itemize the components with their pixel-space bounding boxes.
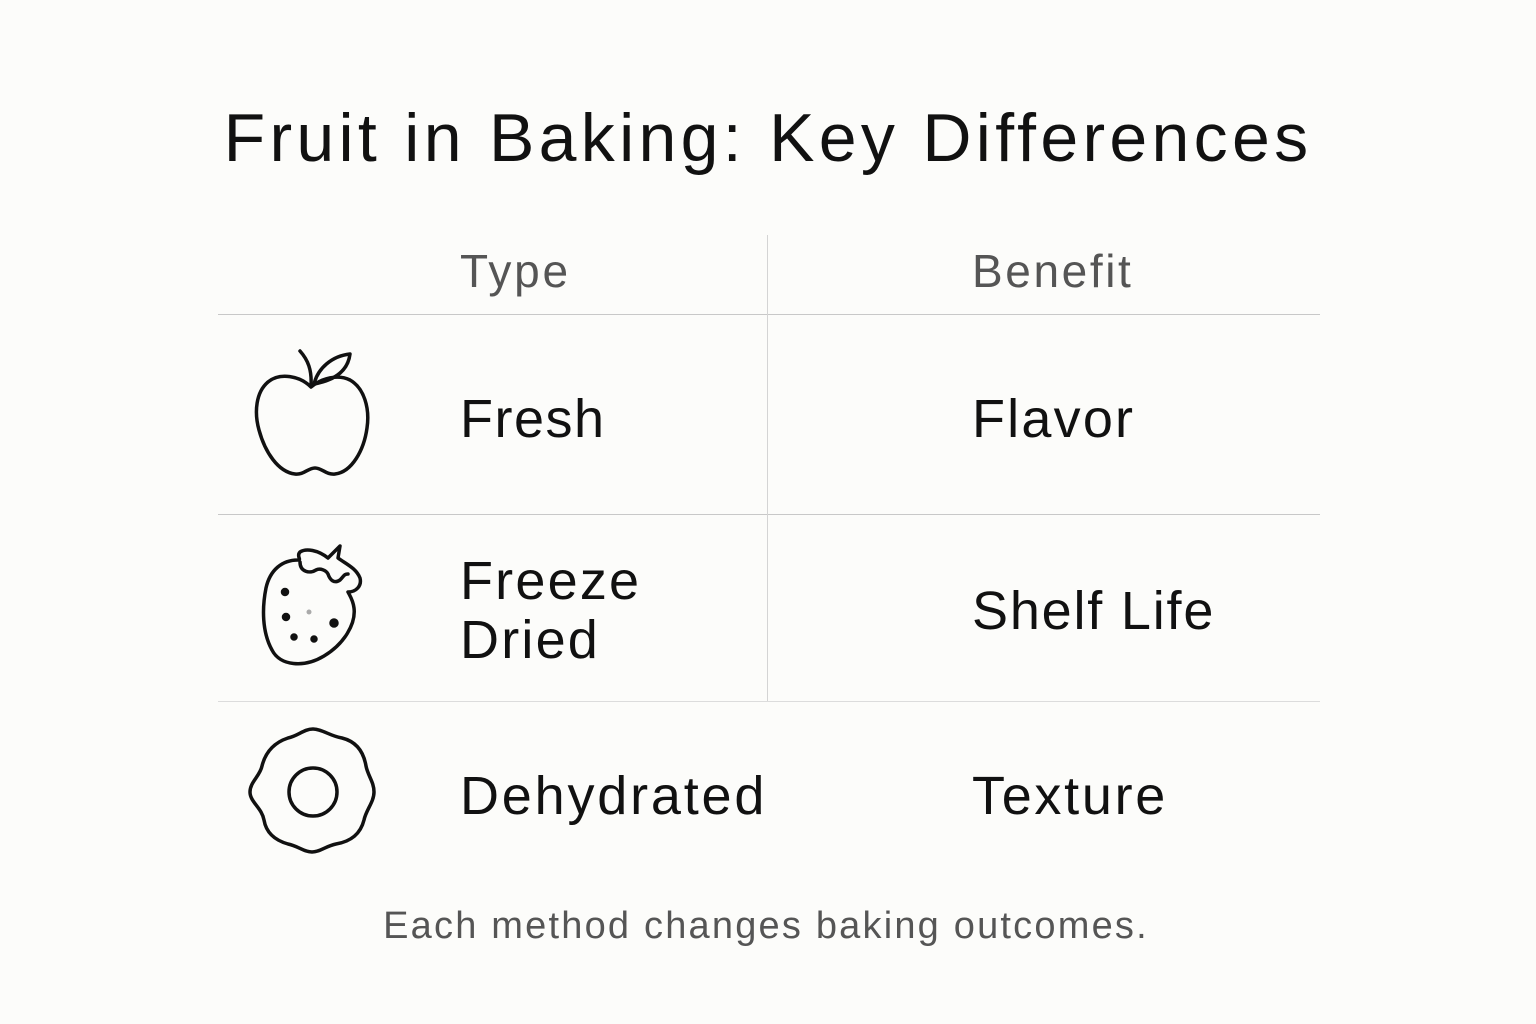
text: Flavor: Flavor <box>972 389 1135 449</box>
title: Fruit in Baking: Key Differences <box>224 100 1312 176</box>
text: Dehydrated: Dehydrated <box>460 766 767 826</box>
footer caption: Each method changes baking outcomes. <box>383 905 1149 947</box>
text: Freeze Dried: Dried <box>460 610 600 670</box>
text: Freeze Dried: Freeze <box>460 551 641 611</box>
icon: strawberry <box>262 544 362 666</box>
text: Fresh: Fresh <box>460 389 606 449</box>
text: Texture: Texture <box>972 766 1168 826</box>
header: Type: Type <box>460 245 571 297</box>
text: Freeze Dried <box>460 551 641 670</box>
icon: dried fruit ring <box>248 727 376 854</box>
header: Benefit: Benefit <box>972 245 1133 297</box>
text: Shelf Life: Shelf Life <box>972 581 1215 641</box>
icon: apple <box>254 349 370 476</box>
